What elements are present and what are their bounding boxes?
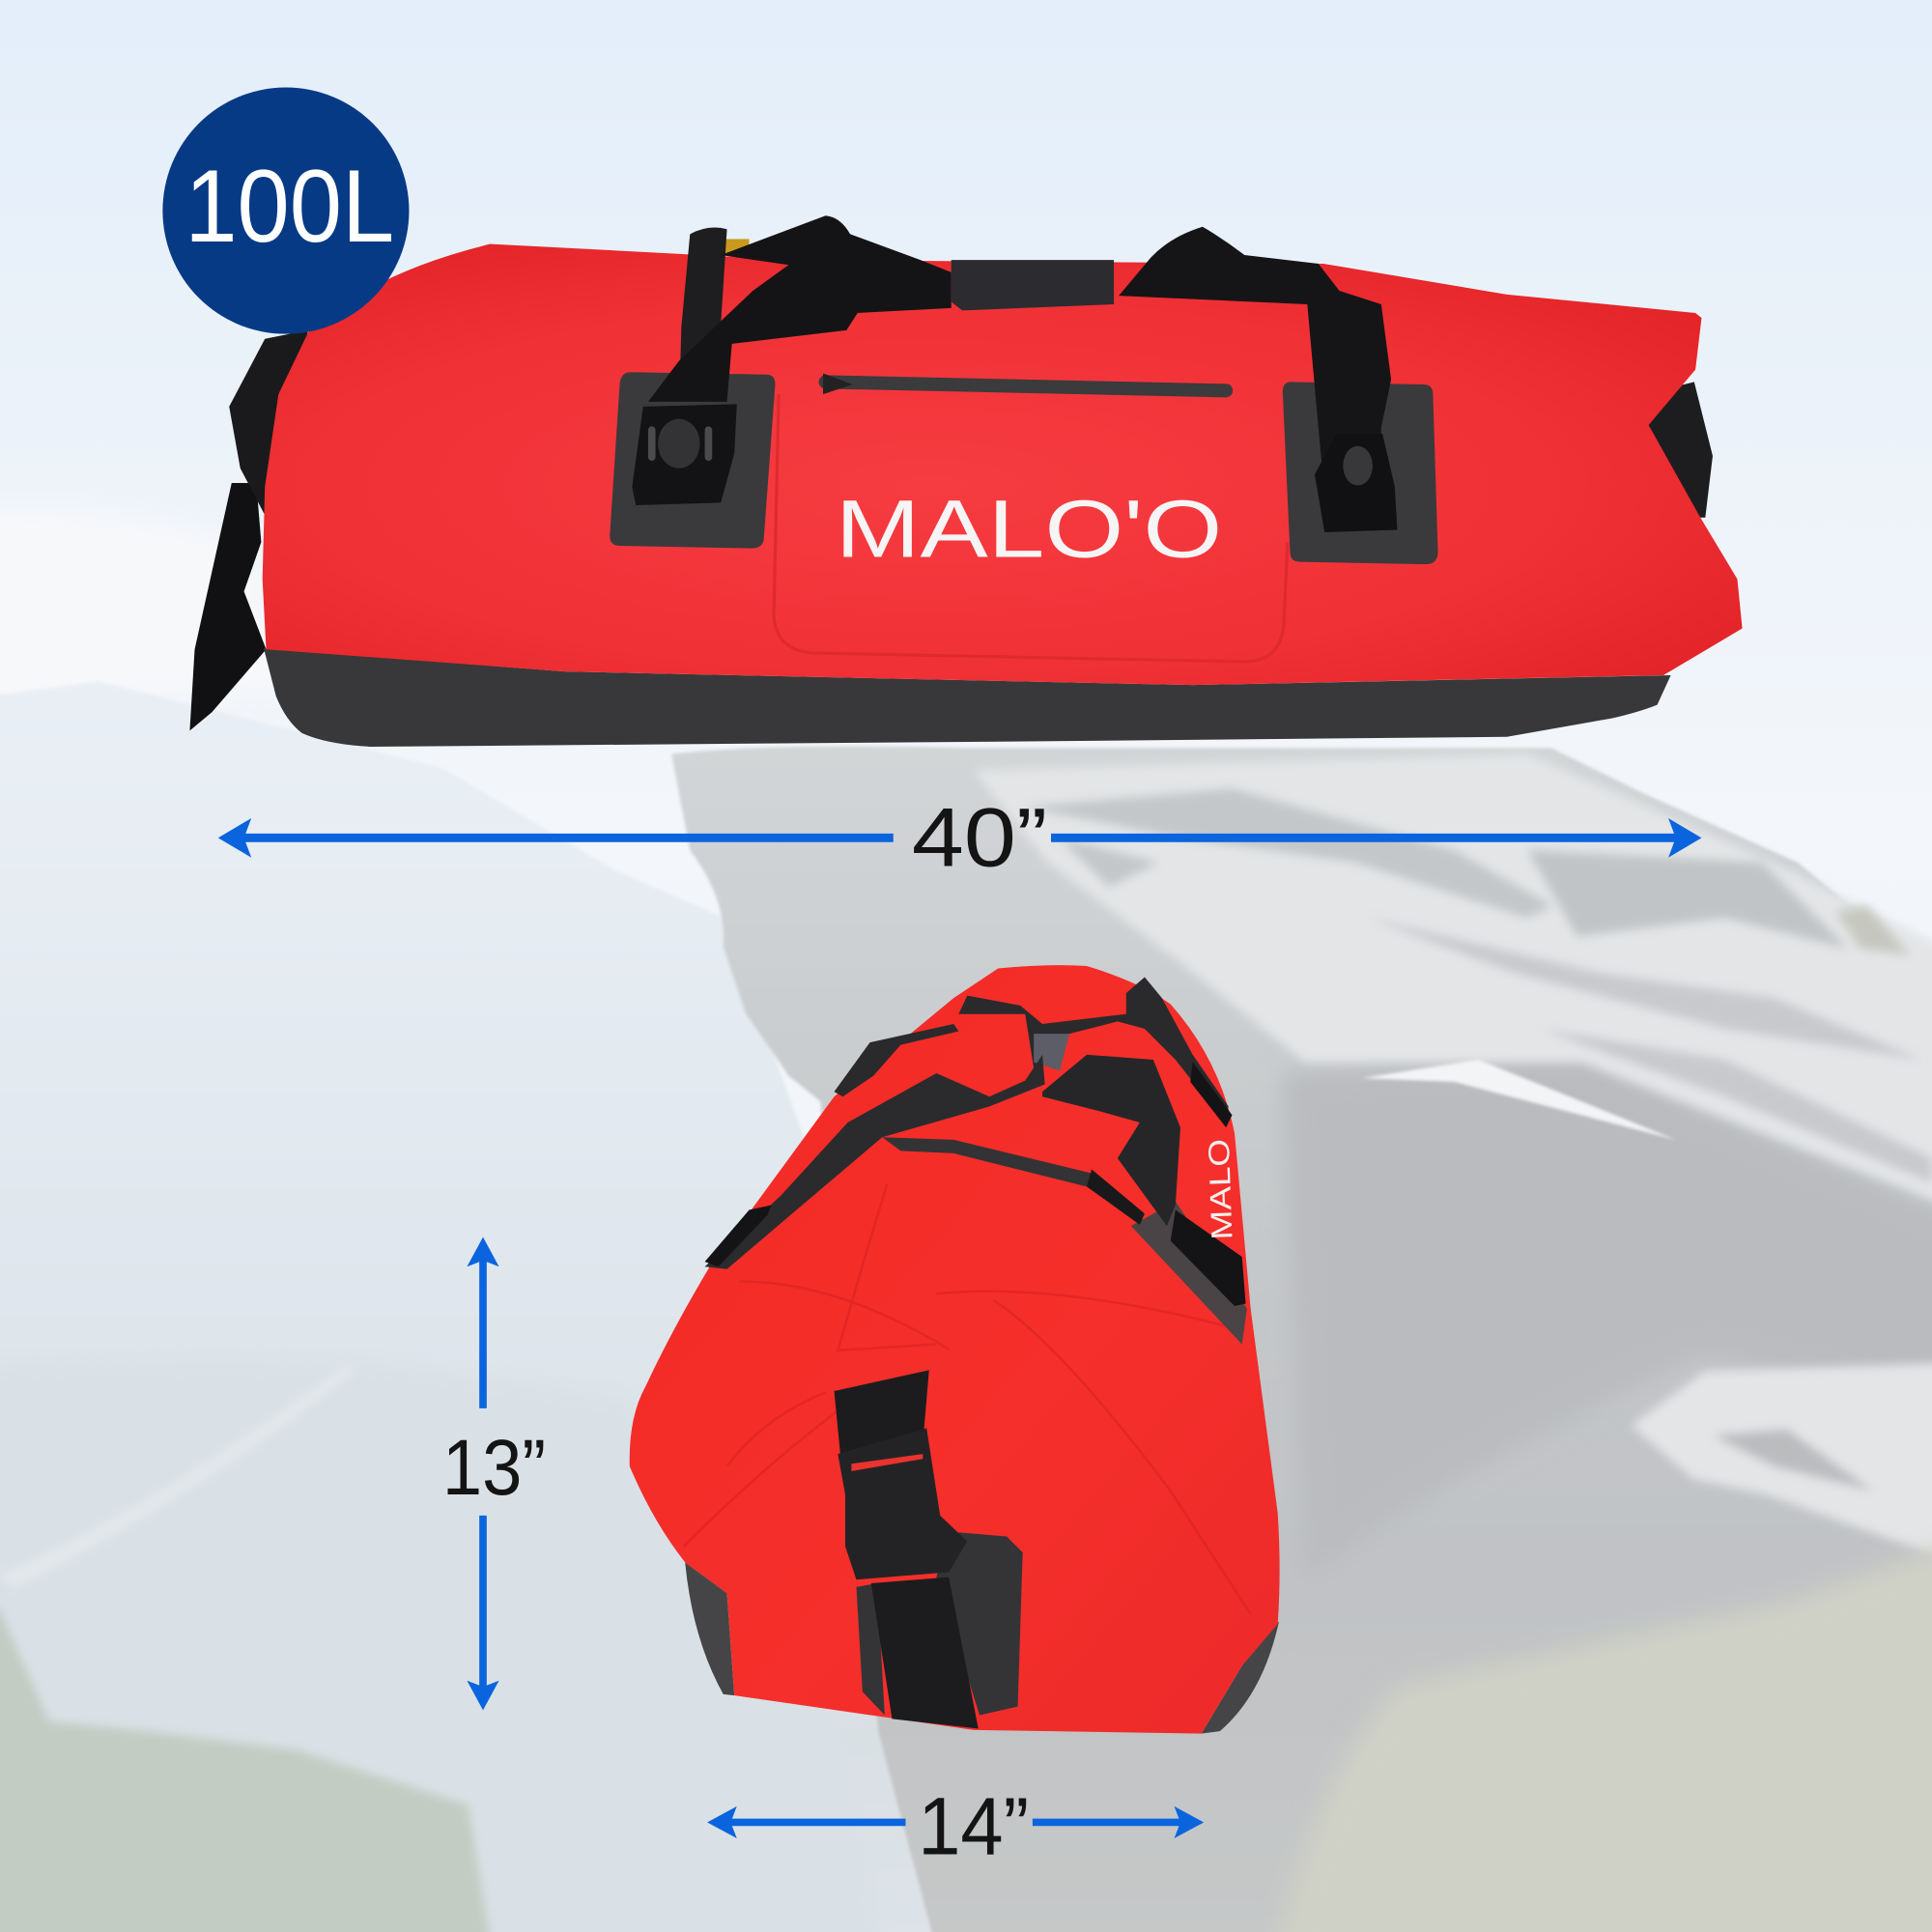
length dimension: 40 inches: [218, 791, 1701, 885]
capacity badge: [162, 88, 409, 334]
right handle: [1119, 227, 1391, 493]
arrow up: [467, 1237, 499, 1408]
product photo: top duffel bag, front view: [189, 215, 1743, 747]
centre handle wrap: [952, 260, 1114, 310]
wide handle strap: [705, 1055, 1045, 1269]
red body: [263, 244, 1743, 685]
left part of end patch: [856, 1583, 885, 1716]
end patch: [936, 1531, 1023, 1716]
dark side patch: [1131, 1202, 1247, 1345]
thin strap: [882, 1137, 1095, 1186]
yellow tag: [722, 239, 750, 254]
end strap: [835, 1370, 979, 1729]
arrow right: [1033, 1806, 1204, 1838]
arrow left: [707, 1806, 906, 1838]
zipper: [823, 373, 1226, 394]
right handle loop: [1042, 1055, 1180, 1226]
black base: [264, 648, 1671, 747]
arrow right: [1051, 818, 1701, 858]
upper top strap: [958, 977, 1229, 1122]
width dimension: 14 inches: [707, 1781, 1204, 1872]
logo on bag: MALO'O: [836, 484, 1222, 575]
side straps left: [189, 330, 308, 730]
grey tab: [1034, 1034, 1069, 1070]
side buckle right: [1645, 382, 1713, 518]
arrow left: [218, 818, 894, 858]
label 14: 14”: [918, 1781, 1029, 1872]
folds: [684, 1184, 1251, 1614]
arrow down: [467, 1516, 499, 1710]
label 13: 13”: [442, 1424, 546, 1512]
D rings and buckles: [705, 1062, 1246, 1306]
side logo: MALO: [1203, 1138, 1239, 1240]
capacity badge: 100L: [185, 148, 394, 264]
left handle: [648, 215, 952, 402]
pocket seam: [774, 394, 1288, 662]
right buckle: [1315, 434, 1397, 532]
right handle patch: [1283, 382, 1438, 564]
left handle patch: [610, 372, 775, 549]
dark corners: [685, 1562, 1279, 1734]
height dimension: 13 inches: [442, 1237, 546, 1710]
product photo: second duffel bag, end view: [630, 965, 1280, 1734]
left buckle: [632, 404, 737, 505]
left top strap: [835, 1024, 958, 1096]
red body: [630, 965, 1280, 1734]
label 40: 40”: [912, 791, 1047, 885]
left vertical strap: [680, 228, 727, 370]
